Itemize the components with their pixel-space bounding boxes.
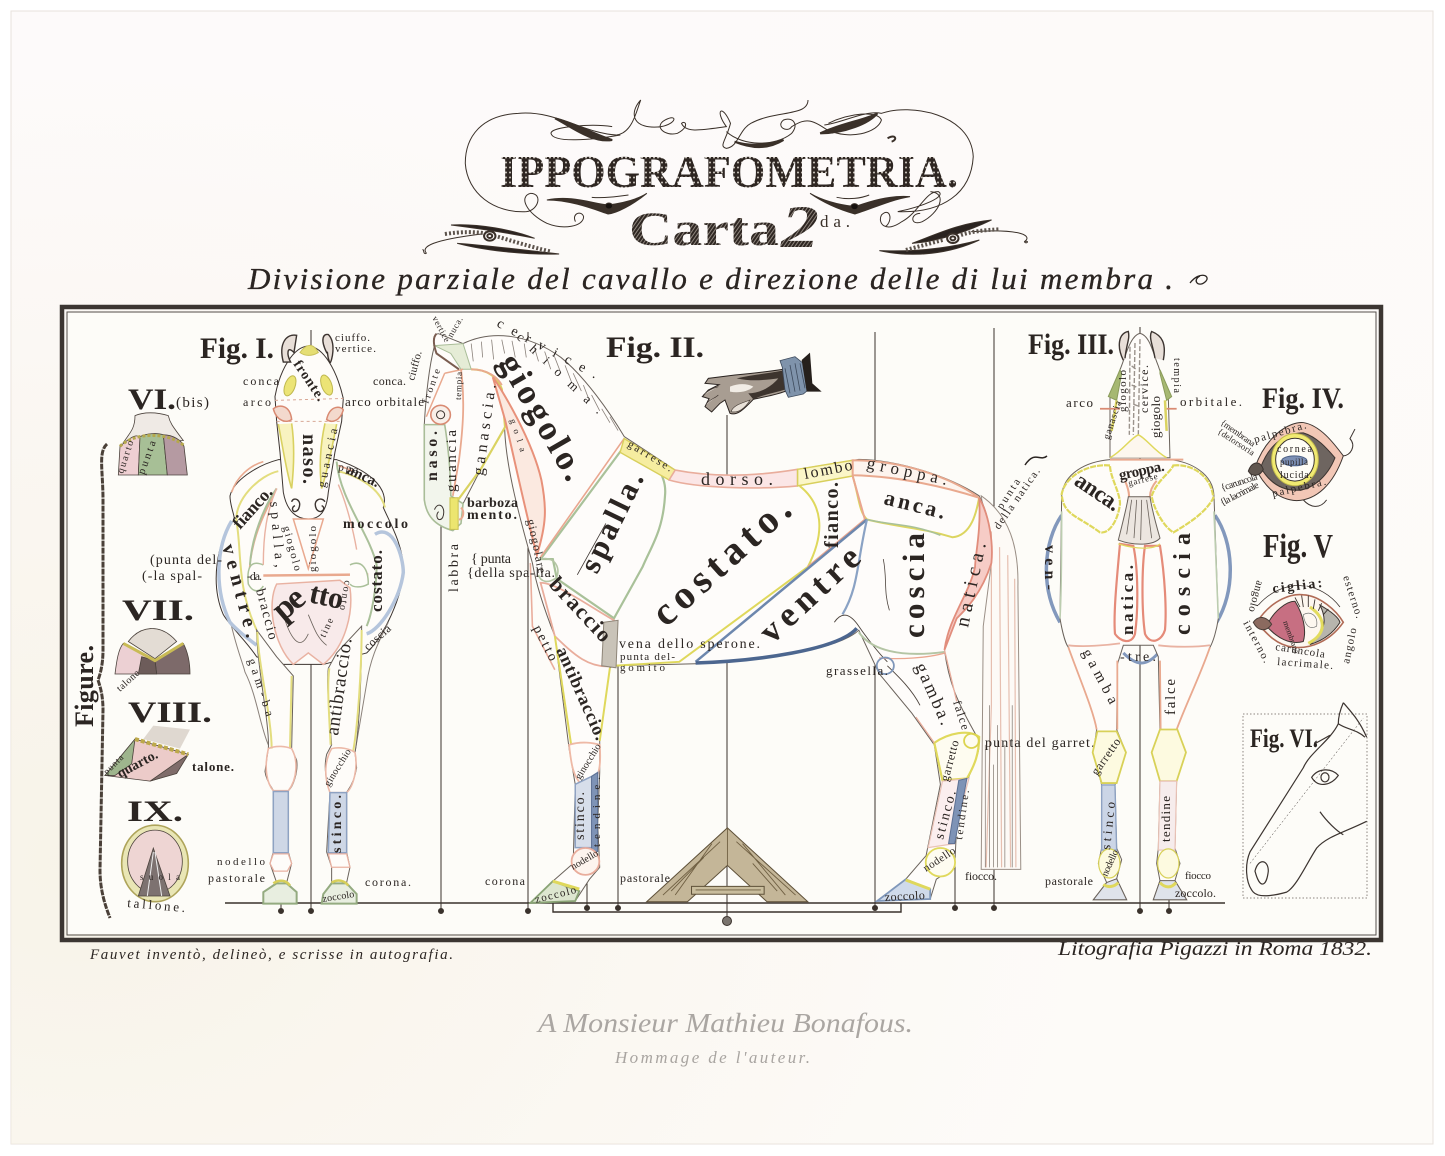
tail <box>981 496 1021 869</box>
Fig. II small part labels: vena dello sperone. <box>619 637 760 652</box>
Fig. I part labels: zoccolo <box>322 889 355 905</box>
side view drawing <box>424 334 1021 903</box>
back bands <box>669 469 798 488</box>
Fig. II large part labels: costato. <box>642 486 800 635</box>
Fig. V: eye: caruncola <box>1275 641 1326 661</box>
Fig. III part labels: groppa. <box>1118 459 1166 484</box>
Fig VI bis: hoof: quarto <box>115 439 136 475</box>
Fig. V: eye: Fig. V <box>1263 528 1333 565</box>
Fig. II small part labels: nodello <box>921 845 958 875</box>
Fig. II small part labels: garretto <box>937 739 962 783</box>
Fig. III part labels: gamba <box>1078 646 1121 707</box>
Fig. I part labels: costato. <box>367 550 386 612</box>
hand holding plumb line <box>702 353 822 414</box>
Fig. II small part labels: fiocco. <box>965 869 997 883</box>
Fig. IV: eye: cornea <box>1277 444 1313 455</box>
Fig. II small part labels: garrese. <box>625 438 675 474</box>
Fig. II small part labels: labbra <box>447 543 462 592</box>
subtitle: Carta 2da <box>629 194 850 260</box>
side key: hoof figures VI to IX <box>70 383 234 918</box>
Fig. III part labels: fiocco <box>1185 870 1212 882</box>
Fig. II large part labels: giogolo. <box>491 346 595 487</box>
Fig. I part labels: pe <box>264 579 313 628</box>
shoulder <box>541 446 665 618</box>
hind leg <box>934 733 979 780</box>
Fig. III part labels: arco <box>1066 395 1093 410</box>
Fig. V: eye: angolo <box>1340 626 1360 665</box>
rear view drawing <box>1046 331 1230 900</box>
Fig. II small part labels: ganascia. <box>470 383 500 477</box>
Fig. III part labels: orbitale. <box>1180 394 1242 409</box>
handwritten note: Hommage de l'auteur. <box>614 1048 810 1067</box>
Fig. I part labels: tto <box>307 577 347 616</box>
Fig VI bis: hoof: (bis) <box>176 395 209 411</box>
Fig. III part labels: natica. <box>1118 565 1137 635</box>
Fig VI bis: hoof: VI. <box>128 383 176 416</box>
Fig IX: hoof sole: suola <box>140 872 180 882</box>
body <box>424 334 992 903</box>
Fig. II small part labels: chioma. <box>514 329 606 417</box>
Fig. II small part labels: stinco. <box>573 792 588 840</box>
Fig IX: hoof sole: tallone. <box>127 895 186 915</box>
Fig. III part labels: giogolo <box>1117 370 1129 412</box>
Fig. II small part labels: stinco. <box>932 789 960 841</box>
Fig. I part labels: antibraccio. <box>322 637 357 737</box>
head <box>424 425 463 531</box>
Fig. I part labels: arco orbitale <box>345 394 424 409</box>
buttock columns <box>1115 544 1137 641</box>
Fig VIII: hoof: punta <box>101 752 125 776</box>
Fig. IV: eye: {caruncola <box>1220 471 1260 494</box>
Fig. II small part labels: zoccolo <box>884 888 925 904</box>
tail dock <box>1118 497 1160 544</box>
Fig. II small part labels: giogolare <box>524 518 549 574</box>
Fig VIII: hoof: VIII. <box>128 696 212 729</box>
Fig. IV: eye <box>1216 382 1355 509</box>
haunch <box>853 476 979 537</box>
Fig. II heading: Fig. II. <box>606 331 704 364</box>
Fig. II small part labels: gomito <box>620 662 666 674</box>
Fig. I part labels: gam-ba <box>245 657 277 719</box>
Fig. I part labels: giogolo <box>307 526 319 572</box>
Fig VII: hoof: VII. <box>122 594 194 627</box>
Fig. II small part labels: nodello <box>569 848 600 873</box>
Fig VI bis: hoof <box>115 383 209 476</box>
croup yellow areas <box>1062 465 1120 533</box>
Fig. I part labels: fianco. <box>228 482 276 533</box>
Fig IX: hoof sole: IX. <box>127 795 183 828</box>
Fig VIII: hoof: talone. <box>192 759 234 774</box>
Fig. II small part labels: antibraccio. <box>552 643 611 743</box>
Fig. II small part labels: falce <box>950 699 973 731</box>
Fig. I part labels: moccolo <box>343 517 408 532</box>
Fig. II small part labels: della natica. <box>992 466 1043 532</box>
Fig VII: hoof <box>115 594 194 694</box>
Fig. II small part labels: guancia <box>444 430 460 492</box>
Fig. I part labels: pastorale <box>208 871 265 885</box>
Fig. II small part labels: ciuffo. <box>405 349 425 382</box>
Fig. I part labels: (-la spal- <box>142 569 202 584</box>
Fig. I part labels: conto <box>337 579 353 611</box>
Fig. VI: head sketch <box>1243 703 1367 898</box>
Fig. III part labels: -tre. <box>1120 650 1156 665</box>
Fig. II small part labels: naso. <box>424 431 441 481</box>
Fig. II small part labels: fronte <box>420 367 443 405</box>
Fig. III part labels: garrese <box>1127 471 1159 488</box>
subtitle: Carta 2da: Carta <box>629 203 779 256</box>
Fig. I part labels: fronte. <box>290 358 328 404</box>
Fig. I part labels: stinco. <box>330 795 345 853</box>
title: IPPOGRAFOMETRIA. <box>500 146 958 197</box>
Fig. II large part labels: spalla. <box>572 466 651 578</box>
Fig. II small part labels: natica. <box>951 540 991 629</box>
Fig. III part labels: tempia <box>1171 358 1182 394</box>
Fig. II small part labels: grassella. <box>826 663 888 678</box>
Fig. III part labels: ven- <box>1041 545 1058 590</box>
label: Figure: Figure. <box>70 645 99 727</box>
wooden set square <box>647 828 808 902</box>
Fig. II small part labels: mento. <box>467 508 517 523</box>
subtitle: Carta 2da: da. <box>820 212 850 231</box>
Fig VII: hoof: talone <box>115 668 142 694</box>
Fig. I part labels: arco <box>243 395 271 409</box>
Fig. II large part labels: anca. <box>882 485 948 524</box>
Fig. I part labels: spalla, <box>266 501 287 568</box>
Fig. II small part labels: cervice. <box>494 316 600 382</box>
Fig. I part labels: coscia <box>361 621 394 653</box>
Fig. II small part labels: tendine. <box>953 789 972 840</box>
Fig. II small part labels: gola <box>508 418 528 453</box>
Fig. III part labels: tendine <box>1158 796 1173 842</box>
front view drawing <box>216 334 403 904</box>
Fig. I part labels: tine <box>318 616 336 639</box>
Fig. III part labels: anca. <box>1070 467 1126 516</box>
Fig. I part labels: conca. <box>373 374 406 388</box>
Fig. II small part labels: groppa. <box>865 453 949 489</box>
Fig. V: eye: lacrimale. <box>1277 656 1334 672</box>
Fig. III part labels: falce <box>1163 679 1179 715</box>
Fig. I: front view of the horse <box>142 332 424 905</box>
Fig. I part labels: guancia <box>314 426 341 489</box>
Fig. II small part labels: nuca. <box>445 315 465 339</box>
credit: lithographer: Litografia Pigazzi in Roma 1832. <box>1057 938 1372 960</box>
Fig. III heading: Fig. III. <box>1028 328 1114 361</box>
Fig. I heading: Fig. I. <box>200 332 274 365</box>
Fig. II small part labels: tempia <box>453 372 464 400</box>
Fig. III part labels: stinco <box>1098 801 1118 850</box>
Fig. II small part labels: corona <box>485 874 526 888</box>
Fig. II small part labels: punta del garret...lo <box>985 736 1117 751</box>
Fig. II: side view of the horse <box>405 314 1117 906</box>
Fig. I part labels: ginocchio <box>322 747 354 789</box>
Fig. I part labels: (punta del- <box>150 553 222 568</box>
Fig. IV: eye: pupilla <box>1280 457 1308 467</box>
Fig. I part labels: -da. <box>247 569 262 583</box>
Fig. II small part labels: dorso. <box>701 469 773 489</box>
Fig. III part labels: pastorale <box>1045 874 1093 888</box>
Fig. V: eye: interno. <box>1240 619 1273 665</box>
plate frame <box>62 307 1381 940</box>
Fig. I part labels: vertice. <box>335 343 376 355</box>
Fig. II small part labels: punta <box>994 476 1023 512</box>
Fig. I part labels: conca <box>243 374 280 388</box>
Fig. II small part labels: vertice <box>430 314 452 344</box>
Fig. II large part labels: fianco. <box>821 482 843 548</box>
Fig. II small part labels: barboza <box>467 496 518 511</box>
Fig. III part labels: zoccolo. <box>1175 886 1216 900</box>
Fig. II small part labels: { punta <box>471 552 512 567</box>
Fig. V: eye <box>1240 528 1365 672</box>
arm <box>541 583 614 666</box>
Fig. II small part labels: punta del- <box>620 651 675 663</box>
Fig. II small part labels: tendine. <box>591 777 603 847</box>
Fig. I part labels: ppa <box>337 461 359 476</box>
Fig. I part labels: corona. <box>365 875 411 889</box>
Fig. I part labels: ventre. <box>217 542 263 640</box>
Fig. III: rear view of the horse <box>1028 328 1242 900</box>
title ornament: flourishes <box>422 100 1027 254</box>
Fig. V: eye: ciglia: <box>1272 576 1323 597</box>
Fig. I part labels: anca. <box>344 462 382 491</box>
Fig IX: hoof sole <box>122 795 188 915</box>
Fig. II small part labels: {della spa-lla. <box>467 566 555 581</box>
Fig. IV: eye: palpebra. <box>1253 419 1308 446</box>
measuring lines and baseline <box>225 327 1225 926</box>
Fig. III part labels: coscia <box>1170 533 1196 635</box>
heading: division of the horse: Divisione parziale del cavallo e direzione delle di lui membra . <box>247 261 1173 296</box>
Fig VIII: hoof: quarto. <box>115 748 161 782</box>
brace: Figure <box>98 444 110 918</box>
Fig. I part labels: braccio <box>252 587 280 641</box>
Fig. I part labels: giogolo <box>280 525 304 573</box>
Fig. V: eye: angolo <box>1246 579 1266 614</box>
belly <box>696 520 867 662</box>
Fig. II small part labels: pastorale <box>620 871 670 885</box>
Fig. II small part labels: gamba. <box>911 659 956 728</box>
Fig. II large part labels: braccio <box>544 571 617 647</box>
Fig. III part labels: nodello <box>1100 848 1121 878</box>
Fig. II small part labels: lombo <box>803 457 854 483</box>
mane hatching <box>471 340 618 431</box>
Fig. III part labels: cervice. <box>1137 365 1151 413</box>
Fig VI bis: hoof: punta <box>136 439 159 476</box>
Fig. II small part labels <box>405 314 1117 906</box>
buttock <box>944 498 992 650</box>
Fig. II large part labels <box>491 346 948 651</box>
Fig. I part labels: nodello <box>217 856 266 868</box>
Fig. II small part labels: petto <box>529 623 560 664</box>
subtitle: Carta 2da: 2 <box>780 194 819 260</box>
Fig. III part labels: ganascia <box>1101 399 1124 441</box>
Fig. III part labels: giogolo <box>1148 396 1163 438</box>
Fig. IV: eye: lucida. <box>1280 470 1312 481</box>
Fig VIII: hoof <box>101 696 234 782</box>
rear body <box>1060 460 1218 900</box>
Fig. IV: eye: Fig. IV. <box>1262 382 1344 415</box>
Fig. IV: eye: {membrana <box>1219 417 1257 449</box>
handwritten dedication: A Monsieur Mathieu Bonafous. <box>536 1008 913 1038</box>
Fig. I part labels: ciuffo. <box>335 332 370 344</box>
Fig. II large part labels: ventre <box>751 538 868 651</box>
Fig. IV: eye: {la lacrimale <box>1218 480 1261 509</box>
Fig. I part labels <box>142 332 424 905</box>
Fig. II small part labels: ginocchio <box>573 742 604 782</box>
Fig. II small part labels: zoccolo <box>534 884 578 906</box>
Fig. II large part labels: coscia <box>896 532 931 638</box>
Fig. IV: eye: {delorsoria <box>1216 426 1257 458</box>
barrel <box>614 486 819 666</box>
Fig. III part labels <box>1041 358 1242 900</box>
neck band <box>493 377 545 555</box>
Fig. VI: head sketch: Fig. VI. <box>1250 724 1318 753</box>
Fig. V: eye: esterno. <box>1340 574 1365 620</box>
Fig. III part labels: garretto <box>1088 735 1124 778</box>
Fig. IV: eye: palpebra. <box>1271 476 1328 500</box>
credit: author: Fauvet inventò, delineò, e scrisse in autografia. <box>89 947 453 963</box>
Fig. V: eye: membrana <box>1281 620 1301 655</box>
hocks <box>1093 729 1186 783</box>
Fig. I part labels: naso. <box>298 434 320 484</box>
